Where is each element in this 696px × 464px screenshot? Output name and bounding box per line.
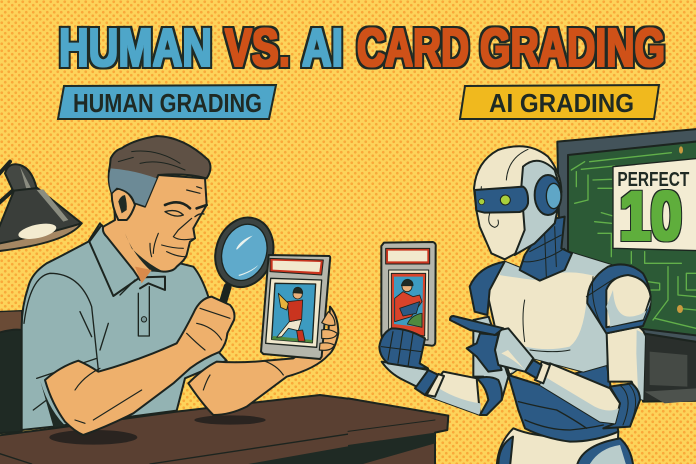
circuit traces <box>571 153 696 328</box>
robot holding arm <box>382 362 502 415</box>
desk corner <box>348 398 448 464</box>
robot pointing forearm <box>525 360 620 423</box>
monitor stand <box>643 333 696 403</box>
title: VS. <box>225 18 290 78</box>
title <box>59 18 665 78</box>
robot head <box>474 146 561 259</box>
label: AI grading: AI GRADING <box>489 88 634 118</box>
left scene: man with magnifying glass <box>0 136 353 464</box>
robot neck <box>520 217 572 281</box>
desk <box>0 395 353 464</box>
monitor <box>557 129 696 347</box>
graded baseball card <box>261 255 337 359</box>
PERFECT 10 sign: 10 <box>619 178 682 254</box>
desk lamp <box>0 162 82 251</box>
hair <box>109 136 210 207</box>
player <box>272 287 312 343</box>
polo shirt <box>22 223 227 430</box>
player <box>395 279 422 327</box>
label: AI grading <box>460 85 659 119</box>
robot lower body <box>497 428 633 464</box>
title: AI <box>302 18 343 78</box>
magnifying glass <box>206 210 282 307</box>
robot pointing hand <box>450 316 533 372</box>
robot waist <box>508 363 618 442</box>
front arm and hand <box>45 297 234 435</box>
face and neck <box>103 175 207 283</box>
right scene: robot and monitor <box>348 129 696 464</box>
robot left shoulder <box>470 262 505 315</box>
title: CARD <box>357 18 469 78</box>
robot back arm <box>473 317 508 400</box>
chair <box>0 311 22 433</box>
label: human grading: HUMAN GRADING <box>73 88 262 118</box>
graded card held by robot <box>381 242 436 346</box>
back arm and hand <box>188 307 338 415</box>
robot right shoulder and arm <box>586 264 651 428</box>
shadow under sleeve <box>40 380 68 428</box>
robot gripping hand <box>379 328 428 368</box>
fingers holding the card <box>319 312 337 350</box>
title: HUMAN <box>59 18 212 78</box>
robot torso <box>487 252 611 375</box>
